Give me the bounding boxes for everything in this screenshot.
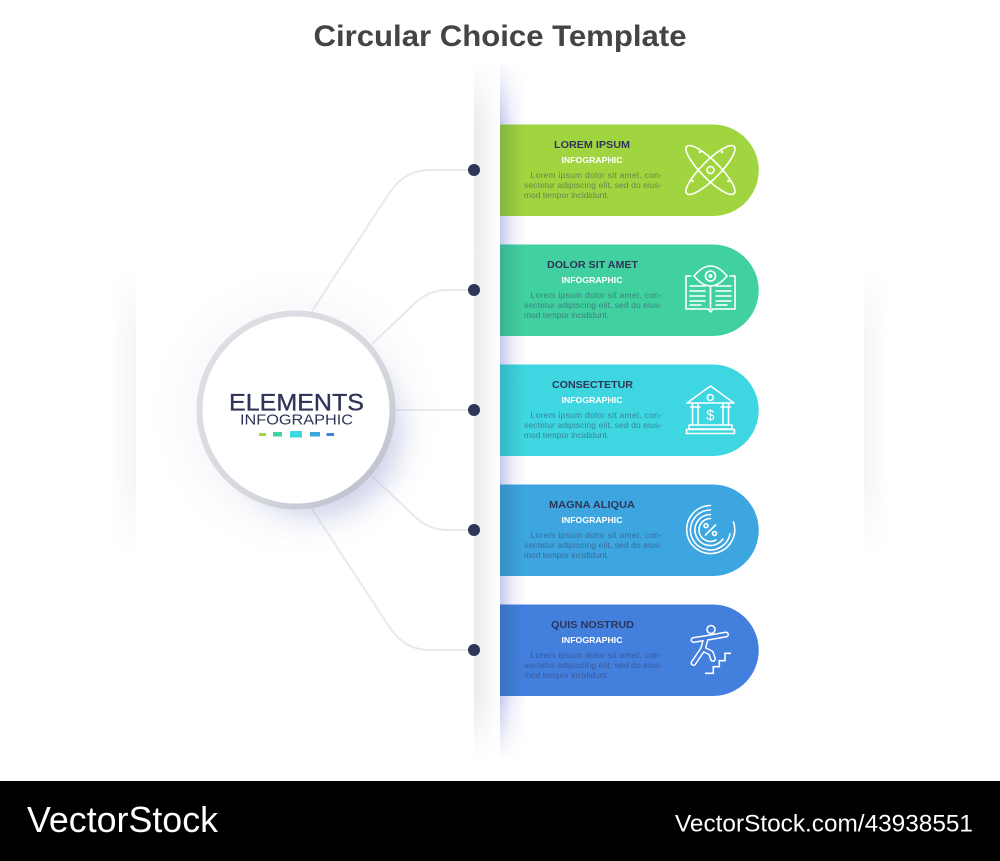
body text: sectetur adipiscing elit, sed do eius- — [524, 180, 662, 190]
heading: QUIS NOSTRUD — [551, 619, 634, 631]
right side shadow — [864, 318, 869, 502]
heading: DOLOR SIT AMET — [547, 259, 639, 271]
body text: Lorem ipsum dolor sit amet, con- — [530, 290, 662, 300]
icon: book with eye — [686, 266, 735, 312]
central circle — [186, 302, 406, 522]
body text: mod tempor incididunt. — [524, 670, 609, 680]
subheading: INFOGRAPHIC — [562, 155, 622, 165]
circle subheading: INFOGRAPHIC — [240, 412, 353, 428]
heading: CONSECTETUR — [552, 379, 633, 391]
icon: atom — [681, 140, 740, 200]
heading: MAGNA ALIQUA — [549, 499, 635, 511]
body text — [524, 170, 662, 200]
colour key — [259, 431, 334, 438]
subheading: INFOGRAPHIC — [562, 395, 622, 405]
subheading: INFOGRAPHIC — [562, 515, 622, 525]
body text: Lorem ipsum dolor sit amet, con- — [530, 650, 662, 660]
connector lines — [312, 170, 474, 650]
body text: mod tempor incididunt. — [524, 430, 609, 440]
panel: lorem ipsum — [500, 124, 759, 216]
left side shadow — [129, 324, 136, 494]
subheading: INFOGRAPHIC — [562, 635, 622, 645]
body text: mod tempor incididunt. — [524, 550, 609, 560]
body text: mod tempor incididunt. — [524, 190, 609, 200]
body text: Lorem ipsum dolor sit amet, con- — [530, 530, 662, 540]
body text: Lorem ipsum dolor sit amet, con- — [530, 170, 662, 180]
footer url: VectorStock.com/43938551 — [675, 810, 973, 838]
icon: bank: $ — [706, 407, 715, 424]
body text — [524, 530, 662, 560]
icon: percent radar — [687, 506, 735, 553]
panel: magna aliqua — [500, 484, 759, 576]
body text — [524, 290, 662, 320]
body text: sectetur adipiscing elit, sed do eius- — [524, 660, 662, 670]
subheading: INFOGRAPHIC — [562, 275, 622, 285]
body text — [524, 650, 662, 680]
icon: bank — [686, 386, 734, 434]
panel: quis nostrud — [500, 604, 759, 696]
footer bar — [0, 781, 1000, 861]
body text: sectetur adipiscing elit, sed do eius- — [524, 540, 662, 550]
vertical divider strip — [474, 69, 520, 751]
body text: mod tempor incididunt. — [524, 310, 609, 320]
circle heading: ELEMENTS — [229, 390, 364, 416]
footer logo: VectorStock — [27, 799, 219, 840]
body text: sectetur adipiscing elit, sed do eius- — [524, 300, 662, 310]
body text — [524, 410, 662, 440]
body text: Lorem ipsum dolor sit amet, con- — [530, 410, 662, 420]
panel: consectetur — [500, 364, 759, 456]
body text: sectetur adipiscing elit, sed do eius- — [524, 420, 662, 430]
icon: person climbing stairs — [694, 626, 731, 673]
title: Circular Choice Template — [314, 20, 686, 53]
connector dots — [468, 164, 480, 656]
heading: LOREM IPSUM — [554, 139, 630, 151]
panel: dolor sit amet — [500, 244, 759, 336]
